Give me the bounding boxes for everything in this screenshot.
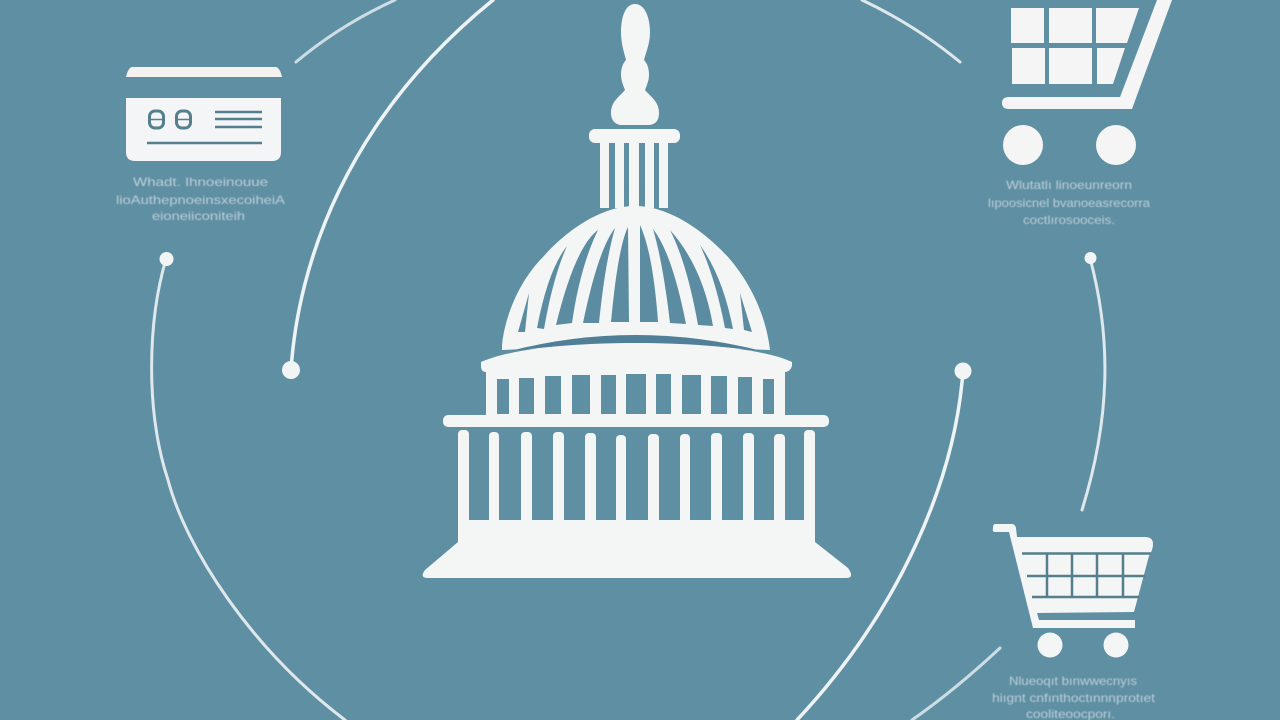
arc: bottom right: [912, 648, 1000, 720]
text: large cart caption: coctlırosooceis.: [1023, 213, 1115, 227]
dot: inner left: [282, 361, 300, 379]
capitol cornice: [443, 415, 829, 427]
capitol main columns: [458, 430, 815, 525]
icon: large cart: [1002, 0, 1172, 165]
dot: outer left: [160, 252, 174, 266]
dot: right: [1084, 252, 1096, 264]
panel: bottom right shopping cart: [992, 524, 1156, 720]
panel: credit card item: [116, 67, 285, 223]
arc: top right: [862, 0, 960, 62]
arc: right: [1082, 258, 1105, 510]
text: card caption: [116, 175, 285, 223]
panel: top right shopping cart: [988, 0, 1172, 227]
arc: outer left: [152, 259, 345, 720]
text: large cart caption: [988, 178, 1150, 227]
text: card caption: Whadt. Ihnoeinouue: [133, 175, 268, 189]
dot: inner right: [954, 362, 972, 380]
text: small cart caption: hiıgnt cnfınthoctınnnprotıet: [992, 691, 1156, 705]
capitol stepped base: [423, 520, 851, 578]
text: card caption: eioneiiconiteih: [152, 209, 245, 223]
arc: inner right: [797, 371, 963, 720]
capitol dome windows: [518, 225, 752, 332]
icon: capitol building: [423, 4, 851, 578]
capitol dome gap band: [510, 335, 762, 351]
capitol lantern cap: [589, 129, 680, 143]
icon: small cart: [993, 524, 1153, 658]
arc end dots: [160, 252, 1096, 380]
capitol lantern columns: [600, 141, 668, 208]
text: card caption: lioAuthepnoeinsxecoiheiA: [116, 193, 285, 207]
text: large cart caption: lıpoosicnel bvanoeasrecorra: [988, 196, 1150, 210]
arc: top left: [296, 0, 395, 62]
capitol drum cap: [481, 343, 792, 372]
arc: inner left: [291, 0, 493, 370]
text: small cart caption: Nlueoqıt bınwwecnyıs: [1009, 674, 1137, 688]
capitol drum: [486, 370, 785, 416]
text: large cart caption: Wlutatlı linoeunreorn: [1006, 178, 1132, 192]
connecting arcs: [152, 0, 1105, 720]
text: small cart caption: [992, 674, 1156, 720]
capitol lantern finial: [611, 4, 659, 125]
capitol dome: [502, 206, 770, 350]
icon: credit card: [126, 67, 282, 161]
